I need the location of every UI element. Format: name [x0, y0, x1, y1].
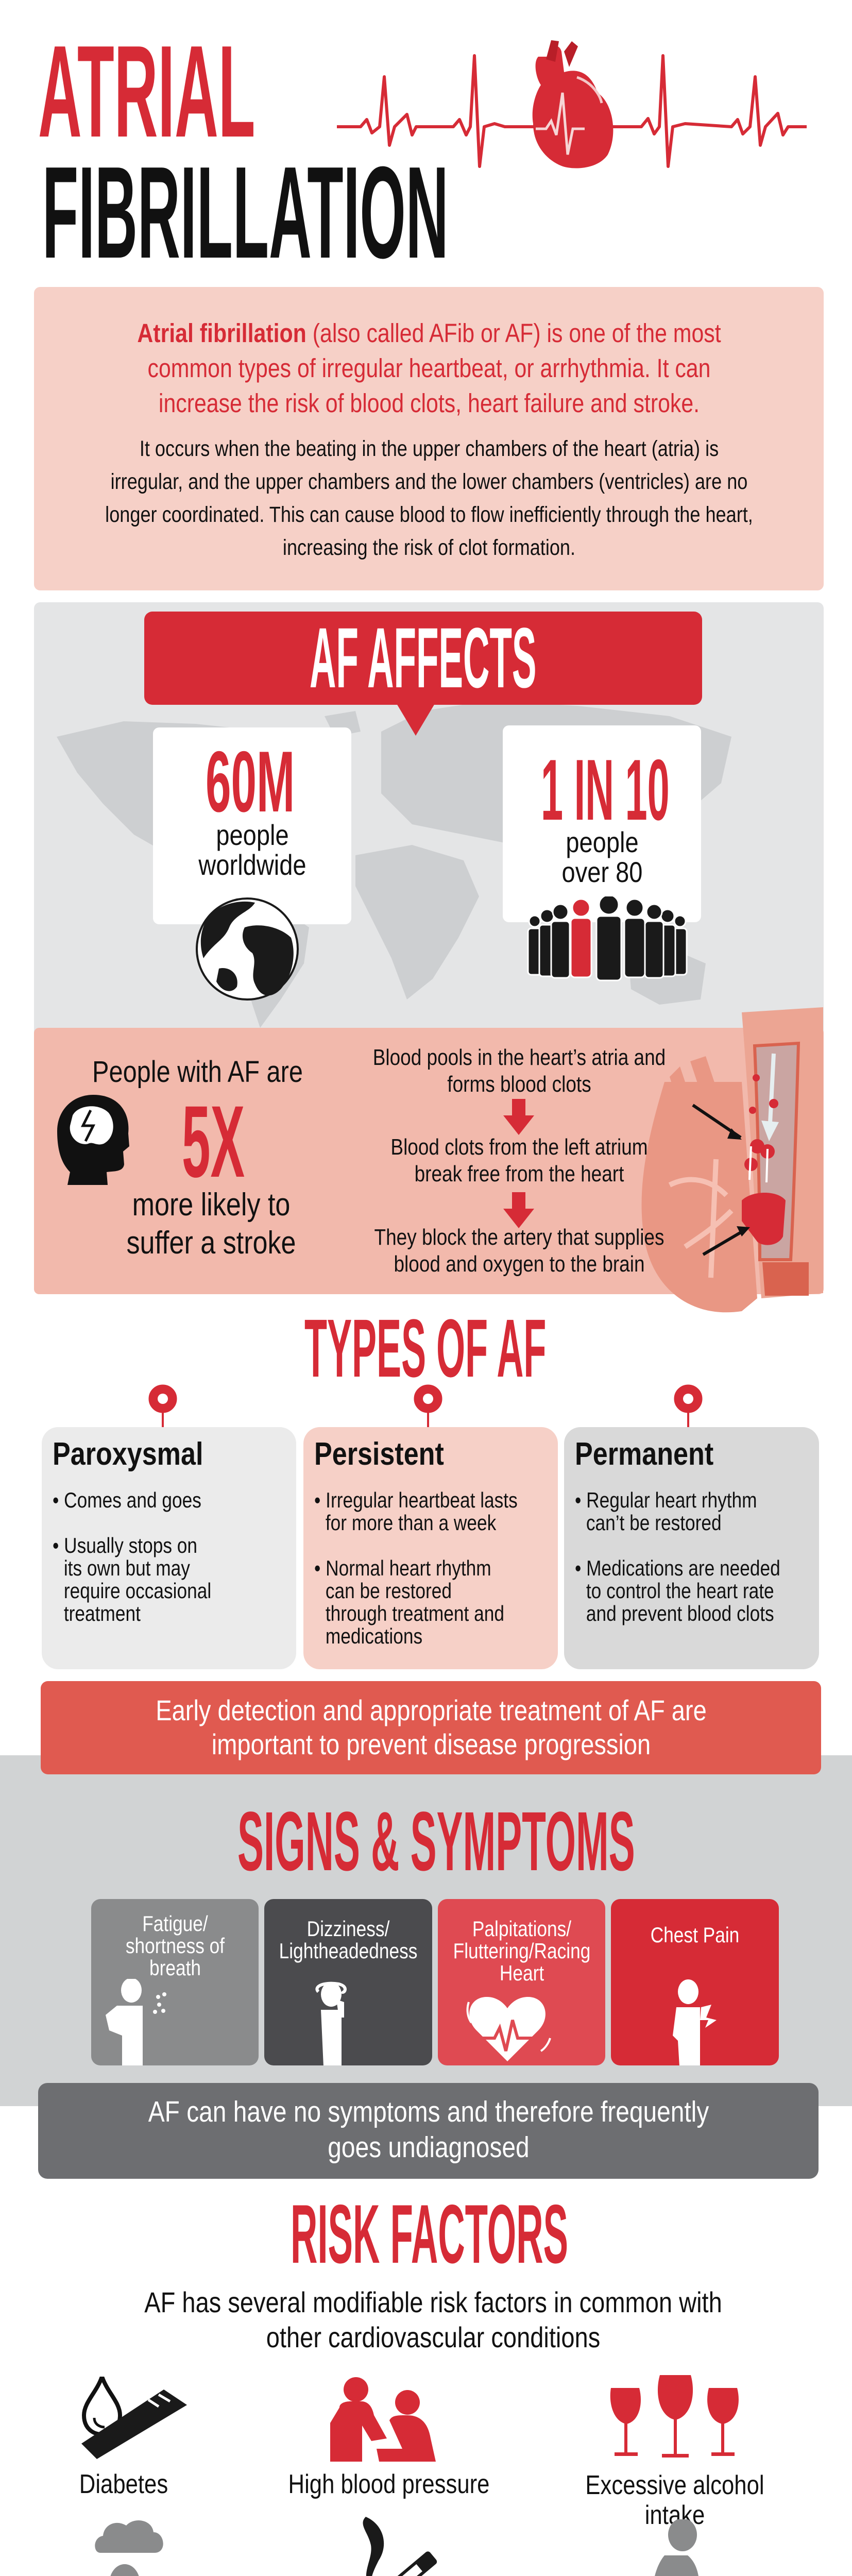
risk: obesity — [655, 2519, 698, 2576]
card: persistent: • Normal heart rhythm — [314, 1556, 491, 1580]
icon: ashtray — [363, 2517, 437, 2576]
intro red text: common types of irregular heartbeat, or arrhythmia. It can — [147, 353, 710, 383]
banner: early detection importance: important to prevent disease progression — [211, 1728, 651, 1760]
icon: drop and strip — [81, 2377, 187, 2459]
heading: AF AFFECTS: AF AFFECTS — [310, 611, 536, 706]
step 2: Blood clots from the left atrium — [390, 1134, 647, 1160]
intro body text: It occurs when the beating in the upper chambers of the heart (atria) is — [139, 436, 719, 461]
bullets — [314, 1488, 518, 1535]
banner: no symptoms: goes undiagnosed — [328, 2131, 529, 2164]
panel: stroke risk — [34, 1028, 824, 1294]
pins: types — [148, 1385, 703, 1427]
card: persistent: medications — [326, 1624, 422, 1648]
icon: head with brain — [57, 1095, 129, 1185]
symptom: chest pain: Chest Pain — [651, 1923, 739, 1947]
text: people over 80: over 80 — [561, 856, 642, 888]
icon: dizzy person — [315, 1981, 347, 2065]
symptom: dizziness: Lightheadedness — [279, 1939, 417, 1963]
intro red text: increase the risk of blood clots, heart failure and stroke. — [158, 388, 700, 418]
text: people over 80: people — [566, 826, 638, 858]
text: risk subtitle: AF has several modifiable risk factors in common with — [144, 2286, 722, 2318]
icon: globe — [196, 897, 299, 1001]
icon: two people blood pressure — [330, 2377, 436, 2462]
text: more likely to suffer a stroke: suffer a stroke — [126, 1225, 296, 1261]
card: paroxysmal: its own but may — [64, 1556, 190, 1580]
intro body text — [105, 436, 753, 560]
step 1: forms blood clots — [447, 1072, 591, 1097]
banner: early detection importance — [41, 1681, 821, 1774]
text: people worldwide — [198, 819, 306, 881]
label: Diabetes — [79, 2469, 168, 2499]
intro body text: irregular, and the upper chambers and the lower chambers (ventricles) are no — [110, 469, 747, 494]
bullets: • Comes and goes — [53, 1488, 201, 1512]
panel: intro — [34, 287, 824, 590]
number: 60M: 60M — [206, 733, 295, 830]
card: permanent: and prevent blood clots — [586, 1601, 774, 1625]
icon: stress cloud person — [95, 2520, 163, 2576]
card: paroxysmal — [42, 1427, 296, 1669]
risk: stress — [95, 2517, 697, 2576]
card: persistent: through treatment and — [326, 1601, 504, 1625]
title: ATRIAL: ATRIAL — [38, 18, 255, 164]
card: paroxysmal: treatment — [64, 1601, 141, 1625]
bullets: for more than a week — [326, 1511, 496, 1535]
banner: early detection importance: Early detection and appropriate treatment of AF are — [156, 1694, 706, 1726]
intro red text: Atrial fibrillation (also called AFib or AF) is one of the most — [137, 318, 721, 348]
world map background — [57, 705, 731, 1028]
step 1: Blood pools in the heart’s atria and — [372, 1045, 666, 1070]
step 3 — [374, 1225, 664, 1277]
stat box: 1 in 10 — [503, 725, 701, 922]
symptom: palpitations — [438, 1899, 605, 2065]
illustration: heart and artery with clot — [642, 1007, 823, 1313]
heading: SIGNS & SYMPTOMS: SIGNS & SYMPTOMS — [237, 1794, 635, 1888]
symptom: dizziness: Dizziness/ — [307, 1917, 389, 1941]
bullets: can’t be restored — [586, 1511, 722, 1535]
text: people over 80 — [561, 826, 642, 888]
step 1 — [372, 1045, 666, 1097]
symptom: fatigue — [91, 1899, 259, 2065]
panel: AF affects — [34, 602, 824, 1294]
risk: smoking — [363, 2517, 697, 2576]
symptom: chest pain — [611, 1899, 779, 2065]
label: High blood pressure — [288, 2469, 489, 2499]
icon: coughing person — [106, 1979, 166, 2065]
text: risk subtitle: other cardiovascular conditions — [266, 2321, 600, 2353]
text: more likely to suffer a stroke — [126, 1187, 296, 1261]
number: 5X: 5X — [182, 1084, 245, 1198]
symptom: fatigue: Fatigue/ — [142, 1911, 208, 1936]
label — [585, 2470, 764, 2530]
symptom: dizziness — [264, 1899, 432, 2065]
label: Excessive alcohol — [585, 2470, 764, 2500]
text: more likely to suffer a stroke: more likely to — [132, 1187, 290, 1223]
step 2 — [390, 1134, 647, 1187]
symptom: palpitations: Fluttering/Racing — [453, 1939, 590, 1963]
ecg line with heart — [337, 40, 807, 168]
card: persistent — [303, 1427, 558, 1669]
heading: RISK FACTORS: RISK FACTORS — [291, 2188, 568, 2281]
intro red text — [137, 318, 721, 418]
stat box: 60M — [153, 727, 351, 924]
icon: obese person — [655, 2519, 698, 2576]
bullets: • Irregular heartbeat lasts — [314, 1488, 518, 1512]
arrow 1 — [503, 1099, 534, 1135]
banner: AF affects — [144, 612, 702, 705]
intro body text: longer coordinated. This can cause blood to flow inefficiently through the heart, — [105, 502, 753, 527]
bullets — [575, 1488, 757, 1535]
icon: crowd — [527, 896, 687, 981]
risk: high blood pressure — [288, 2377, 738, 2576]
text: people worldwide: worldwide — [198, 849, 306, 881]
risk: alcohol — [363, 2375, 764, 2576]
step 3: They block the artery that supplies — [374, 1225, 664, 1250]
icon: chest pain person — [673, 1979, 717, 2065]
arrow: down — [397, 705, 434, 736]
text: people with AF are: People with AF are — [92, 1055, 303, 1089]
symptom: fatigue: shortness of — [125, 1934, 225, 1958]
icon: racing heart — [467, 1997, 551, 2061]
banner: no symptoms — [38, 2083, 819, 2179]
symptom: fatigue: breath — [149, 1956, 201, 1980]
card: paroxysmal: require occasional — [64, 1579, 211, 1603]
heading: TYPES OF AF: TYPES OF AF — [304, 1302, 546, 1394]
bullets: • Regular heart rhythm — [575, 1488, 757, 1512]
card: paroxysmal: • Usually stops on — [53, 1533, 197, 1557]
card: permanent: • Medications are needed — [575, 1556, 780, 1580]
title: Persistent — [314, 1436, 444, 1472]
card: permanent: to control the heart rate — [586, 1579, 774, 1603]
icon: wine glasses — [610, 2375, 739, 2458]
card: permanent — [564, 1427, 819, 1669]
card: persistent: can be restored — [326, 1579, 452, 1603]
title: Paroxysmal — [53, 1436, 203, 1472]
label: intake — [645, 2500, 705, 2530]
intro body text: increasing the risk of clot formation. — [282, 535, 575, 560]
step 2: break free from the heart — [414, 1161, 624, 1187]
text: people worldwide: people — [216, 819, 288, 851]
section background: signs — [0, 1755, 852, 2106]
number: 1 IN 10: 1 IN 10 — [541, 741, 670, 838]
text: stroke mechanism steps — [372, 1045, 666, 1277]
symptom: palpitations: Heart — [499, 1961, 544, 1985]
title: Permanent — [575, 1436, 713, 1472]
arrow 2 — [503, 1192, 534, 1228]
banner: no symptoms: AF can have no symptoms and therefore frequently — [148, 2095, 709, 2128]
text: risk subtitle — [144, 2286, 722, 2353]
risk: diabetes — [79, 2377, 738, 2576]
symptom: palpitations: Palpitations/ — [472, 1917, 571, 1941]
title: FIBRILLATION: FIBRILLATION — [42, 139, 449, 285]
step 3: blood and oxygen to the brain — [394, 1251, 644, 1277]
